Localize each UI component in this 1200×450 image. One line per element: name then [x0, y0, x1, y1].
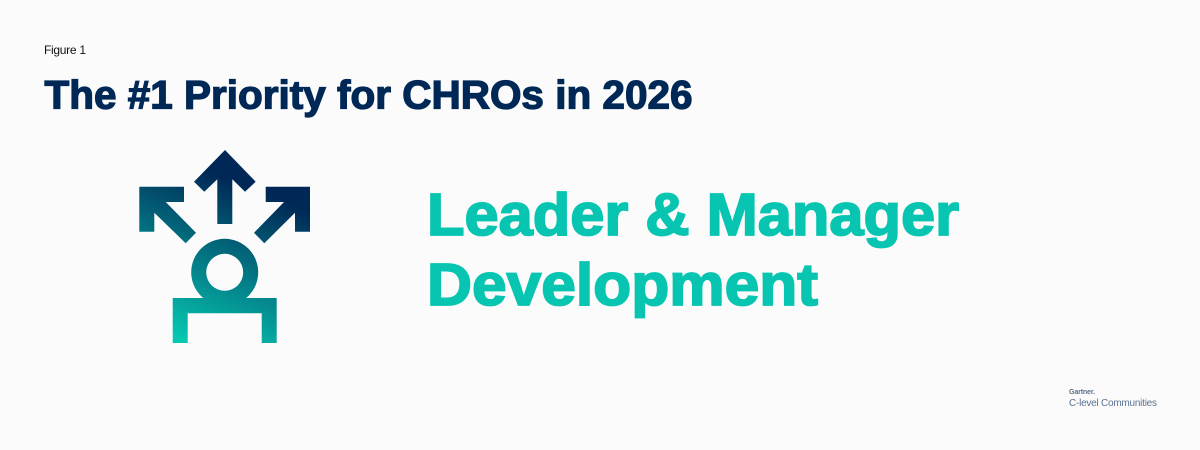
- icon: leader with three outward arrows: [139, 150, 310, 343]
- brand logo: [1069, 389, 1157, 409]
- brand community: C-level Communities: [1069, 398, 1157, 409]
- icon: up-left arrow: [139, 187, 196, 243]
- icon: person head ring: [191, 239, 258, 306]
- brand name: Gartner.: [1069, 389, 1095, 396]
- headline line 1: Leader & Manager: [427, 182, 959, 248]
- icon: up-right arrow: [254, 187, 310, 243]
- figure label: Figure 1: [44, 43, 86, 57]
- headline: [427, 182, 959, 318]
- icon: up arrow: [194, 150, 256, 224]
- headline line 2: Development: [427, 252, 818, 318]
- icon: person shoulders: [173, 298, 277, 343]
- title: The #1 Priority for CHROs in 2026: [44, 73, 692, 117]
